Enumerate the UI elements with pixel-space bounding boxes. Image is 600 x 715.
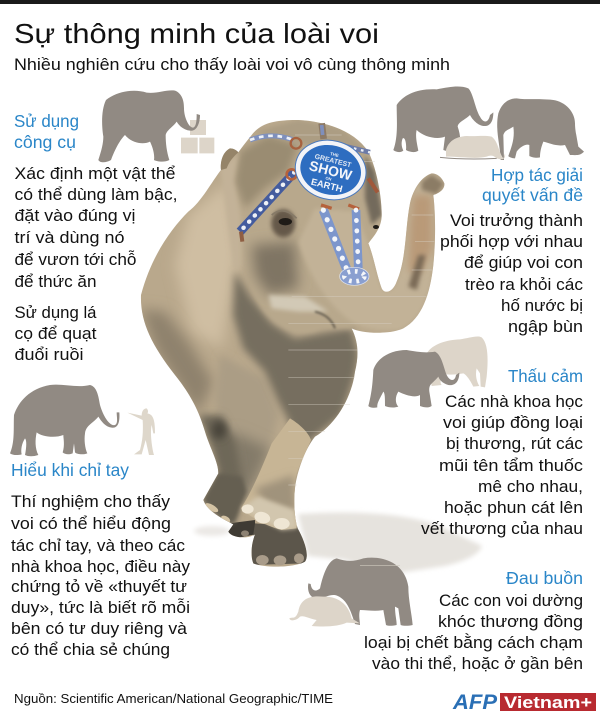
text: empathy body: bị thương, rút các bbox=[446, 434, 583, 453]
shoulder highlight bbox=[175, 182, 238, 348]
text: tool use body: Sử dụng lá bbox=[14, 303, 97, 322]
icon: two elephants and calf bbox=[393, 86, 584, 160]
icon: elephant with dead calf bbox=[289, 558, 413, 627]
text: tool use body: trí và dùng nó bbox=[14, 228, 124, 247]
raised foot bbox=[241, 497, 297, 530]
head bbox=[260, 240, 382, 330]
lower foot bbox=[252, 523, 310, 565]
text: grief body: vào thi thể, hoặc ở gần bên bbox=[372, 654, 583, 673]
forehead and ear shadow bbox=[235, 135, 298, 208]
cheek highlight bbox=[268, 295, 328, 312]
panel: empathy bbox=[368, 337, 584, 538]
main elephant photo bbox=[140, 120, 444, 567]
standing foreleg bbox=[217, 360, 276, 446]
panel: pointing bbox=[10, 385, 190, 659]
text: tool use body: có thể dùng làm bậc, bbox=[14, 185, 178, 204]
text: empathy body: mũi tên tẩm thuốc bbox=[439, 456, 584, 475]
text: empathy body bbox=[421, 392, 584, 538]
title: Sự thông minh của loài voi bbox=[14, 18, 379, 49]
top bar bbox=[0, 0, 600, 4]
trunk inner tone bbox=[408, 195, 432, 272]
text: tool use body: để vươn tới chỗ bbox=[14, 250, 136, 269]
text: cooperation body: ngập bùn bbox=[508, 317, 583, 336]
chest and belly shadow bbox=[233, 272, 358, 452]
text: pointing body: bên có tư duy riêng và bbox=[11, 619, 188, 638]
heading: Hợp tác giải quyết vấn đề: quyết vấn đề bbox=[482, 185, 583, 205]
heading: Đau buồn: Đau buồn bbox=[506, 568, 583, 588]
heading: Hợp tác giải quyết vấn đề: Hợp tác giải bbox=[491, 165, 583, 185]
text: tool use body: đặt vào đúng vị bbox=[14, 206, 136, 225]
text: tool use body: cọ để quạt bbox=[14, 324, 97, 343]
ear edge bbox=[220, 156, 238, 191]
nostril corner bbox=[373, 225, 379, 229]
text: grief body bbox=[364, 591, 583, 673]
subtitle: Nhiều nghiên cứu cho thấy loài voi vô cùng thông minh bbox=[14, 56, 450, 74]
text: empathy body: vết thương của nhau bbox=[421, 519, 583, 538]
leader lines bbox=[288, 135, 434, 485]
panel: cooperation bbox=[393, 86, 584, 336]
show badge bbox=[289, 133, 372, 207]
upper harness straps bbox=[240, 123, 378, 242]
text: empathy body: Các nhà khoa học bbox=[445, 392, 583, 411]
rear leg bbox=[198, 415, 243, 523]
icon: elephant and pointing man bbox=[10, 385, 155, 456]
text: pointing body: nhà khoa học, điều này bbox=[11, 557, 190, 576]
text: tool use body: để thức ăn bbox=[14, 272, 96, 291]
panel: tool use bbox=[14, 90, 214, 364]
text: empathy body: mê cho nhau, bbox=[478, 477, 583, 496]
text: tool use body bbox=[14, 164, 178, 364]
text: cooperation body: hố nước bị bbox=[501, 296, 583, 315]
icon: elephant with boxes bbox=[98, 90, 214, 162]
text: pointing body: có thể chia sẻ chúng bbox=[11, 640, 170, 659]
rear leg crease bbox=[212, 421, 226, 439]
show badge: ON bbox=[325, 175, 332, 182]
show badge: THE bbox=[330, 151, 339, 158]
logo: Vietnam+: Vietnam+ bbox=[504, 694, 592, 712]
trunk tip bbox=[422, 174, 444, 194]
text: tool use body: Xác định một vật thể bbox=[14, 164, 176, 183]
toenails raised foot bbox=[242, 504, 290, 529]
text: pointing body bbox=[11, 492, 190, 659]
head top bbox=[265, 120, 366, 153]
show badge: SHOW bbox=[308, 157, 354, 184]
trunk wrinkles bbox=[408, 255, 426, 290]
text: cooperation body: trèo ra khỏi các bbox=[465, 275, 583, 294]
heading: Sử dụng công cụ: Sử dụng bbox=[14, 111, 79, 131]
mouth crease bbox=[315, 312, 335, 328]
show badge: GREATEST bbox=[314, 153, 353, 170]
heading: Thấu cảm: Thấu cảm bbox=[508, 366, 583, 386]
text: pointing body: voi có thể hiểu động bbox=[11, 514, 171, 533]
text: cooperation body: Voi trưởng thành bbox=[450, 211, 583, 230]
rear foot bbox=[203, 473, 247, 525]
eye bbox=[271, 209, 297, 237]
text: pointing body: Thí nghiệm cho thấy bbox=[11, 492, 171, 511]
toenails rear foot bbox=[204, 501, 249, 536]
show badge: EARTH bbox=[310, 177, 344, 194]
heading: Hợp tác giải quyết vấn đề bbox=[482, 165, 583, 205]
text: tool use body: đuổi ruồi bbox=[14, 345, 84, 364]
text: pointing body: tác chỉ tay, và theo các bbox=[11, 536, 185, 555]
text: pointing body: duy», tức là biết rõ mỗi bbox=[11, 598, 190, 617]
text: cooperation body: phối hợp với nhau bbox=[440, 232, 583, 251]
ear notch bbox=[221, 148, 238, 170]
toenails lower foot bbox=[256, 553, 304, 565]
text: grief body: khóc thương đồng bbox=[438, 612, 583, 631]
raised leg wrinkles bbox=[255, 475, 297, 515]
hidden foot bbox=[228, 520, 255, 538]
text: cooperation body: để giúp voi con bbox=[464, 253, 583, 272]
text: grief body: Các con voi dường bbox=[439, 591, 583, 610]
trunk bbox=[298, 173, 444, 330]
text: grief body: loại bị chết bằng cách chạm bbox=[364, 633, 583, 652]
ground shadow bbox=[194, 512, 482, 575]
heading: Sử dụng công cụ: công cụ bbox=[14, 132, 76, 152]
lower harness straps bbox=[321, 205, 369, 285]
face shadow bbox=[252, 242, 298, 295]
logo: AFP: AFP bbox=[452, 691, 498, 714]
heading: Sử dụng công cụ bbox=[14, 111, 79, 152]
heading: Hiểu khi chỉ tay: Hiểu khi chỉ tay bbox=[11, 460, 129, 480]
flank shading bbox=[140, 308, 213, 415]
text: pointing body: chứng tỏ về «thuyết tư bbox=[11, 577, 187, 596]
text: empathy body: hoặc phun cát lên bbox=[444, 498, 583, 517]
foreleg lower bbox=[232, 432, 270, 505]
raised foreleg bbox=[241, 418, 311, 530]
text: empathy body: voi giúp đồng loại bbox=[443, 413, 583, 432]
text: cooperation body bbox=[440, 211, 583, 336]
source note: Nguồn: Scientific American/National Geographic/TIME bbox=[14, 692, 333, 706]
icon: elephant helping elephant bbox=[368, 337, 488, 408]
panel: grief bbox=[289, 558, 583, 673]
head right shadow bbox=[365, 155, 382, 225]
